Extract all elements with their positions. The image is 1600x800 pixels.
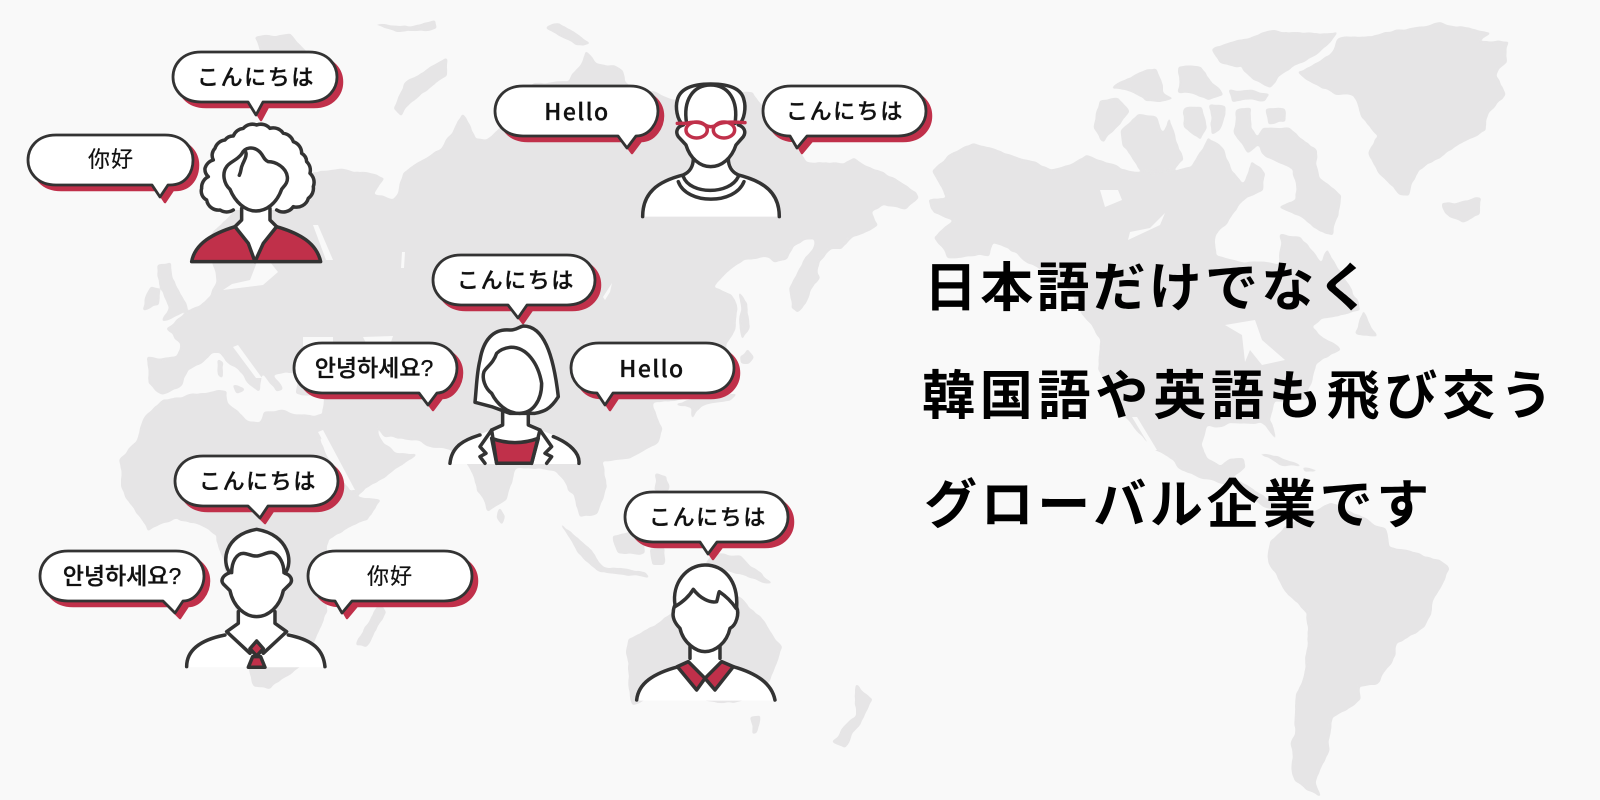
person: bald man with red glasses <box>643 84 779 217</box>
speech bubble: こんにちは: こんにちは <box>197 65 315 90</box>
map: ireland <box>143 288 160 310</box>
lakes: great lakes <box>1225 320 1285 365</box>
map: sicily <box>234 385 246 393</box>
map: islands <box>143 20 873 747</box>
map: sakhalin <box>740 292 750 340</box>
speech bubble: 안녕하세요? <box>40 551 209 618</box>
map: novaya zemlya <box>393 58 448 115</box>
icon: red glasses <box>677 122 745 138</box>
map: sumatra and java <box>560 523 649 577</box>
map: sardinia <box>218 360 224 378</box>
lake: great bear <box>1100 190 1122 207</box>
speech bubble: 안녕하세요?: 안녕하세요? <box>315 355 433 381</box>
speech bubble: 你好 <box>308 551 477 618</box>
speech bubble: Hello <box>571 343 739 410</box>
map: new zealand <box>832 683 873 747</box>
map: great britain <box>158 263 187 320</box>
sea: red sea <box>318 430 355 490</box>
lake: great slave <box>1128 213 1165 240</box>
person group: man with tie <box>40 456 477 667</box>
map: south america <box>1268 503 1449 797</box>
speech bubble: 안녕하세요? <box>294 343 462 410</box>
map: hokkaido <box>740 350 753 363</box>
person: bob hair woman <box>450 326 579 464</box>
speech bubble: Hello <box>495 86 663 153</box>
person group: man with glasses <box>495 84 931 217</box>
speech bubble: 你好 <box>28 135 198 202</box>
map: severnaya zemlya <box>545 22 590 45</box>
heading: main message <box>922 259 1558 535</box>
speech bubble: こんにちは <box>175 456 343 523</box>
speech bubble: こんにちは: こんにちは <box>649 505 767 530</box>
sea: caspian <box>363 336 393 345</box>
map: australia <box>628 597 781 705</box>
sea: black sea <box>303 337 333 346</box>
speech bubble: 你好: 你好 <box>367 564 413 589</box>
speech bubble: こんにちは <box>173 52 342 120</box>
map: africa <box>121 392 382 688</box>
person: young man with red collar <box>637 565 775 701</box>
map: new guinea <box>705 553 773 583</box>
heading line 3: グローバル企業です <box>924 476 1433 535</box>
lake: baikal <box>603 283 612 300</box>
map: madagascar <box>356 603 385 647</box>
map: philippines <box>655 473 668 490</box>
map: svalbard <box>373 20 436 32</box>
heading line 2: 韓国語や英語も飛び交う <box>922 367 1558 426</box>
person group: woman with bob hair <box>294 255 739 464</box>
sea: adriatic <box>233 345 262 378</box>
sea: baltic <box>223 262 278 290</box>
speech bubble: こんにちは: こんにちは <box>457 268 575 293</box>
map: tasmania <box>750 717 760 733</box>
speech bubble: 안녕하세요?: 안녕하세요? <box>63 563 181 589</box>
map: japan <box>678 393 737 417</box>
map: northern america <box>928 23 1509 510</box>
map: sulawesi <box>652 548 665 565</box>
speech bubble: こんにちは <box>763 86 931 153</box>
lakes: finland specks <box>313 225 333 260</box>
map: eurasia <box>148 50 918 517</box>
speech bubble: こんにちは <box>433 255 600 323</box>
speech bubble: こんにちは: こんにちは <box>786 99 904 124</box>
map: franz josef land <box>255 33 305 58</box>
speech bubble: こんにちは: こんにちは <box>199 469 317 494</box>
person group: woman with curly hair <box>28 52 342 262</box>
river speck <box>401 252 405 268</box>
heading line 1: 日本語だけでなく <box>924 259 1374 318</box>
map: borneo <box>613 532 645 553</box>
person: businessman <box>187 529 325 667</box>
person group: man with red collar <box>625 492 793 701</box>
speech bubble: Hello: Hello <box>619 350 685 384</box>
person: curly hair woman <box>192 124 321 262</box>
speech bubble: 你好: 你好 <box>88 147 134 172</box>
map: water gaps <box>223 190 1285 490</box>
speech bubble: こんにちは <box>625 492 793 559</box>
map: sri lanka <box>497 508 505 525</box>
speech bubble: Hello: Hello <box>544 93 610 127</box>
gulf: baja california <box>1132 417 1157 450</box>
